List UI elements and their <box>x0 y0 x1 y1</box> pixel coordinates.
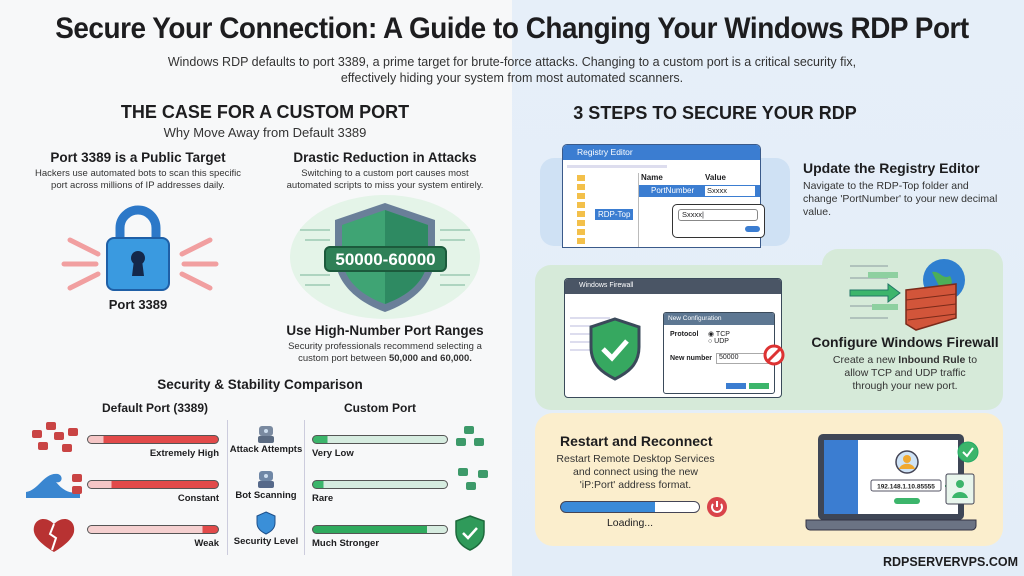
firewall dialog: Protocol <box>670 331 698 338</box>
block: high number ranges <box>286 323 484 364</box>
step 2 text <box>811 334 999 392</box>
bar: scanning default <box>87 480 219 489</box>
icon: padlock <box>62 206 218 291</box>
comparison chart: Bot Scanning <box>235 490 297 501</box>
block: high number ranges: custom port between 50,000 and 60,000. <box>298 353 472 364</box>
comparison chart: Rare <box>312 493 333 504</box>
bar: scanning custom <box>312 480 448 489</box>
firewall dialog: ○ UDP <box>708 338 729 345</box>
block: public target: Port 3389 is a Public Target <box>50 150 226 165</box>
column heading custom: Custom Port <box>344 401 416 415</box>
firewall dialog: 50000 <box>719 354 738 361</box>
registry window: Registry Editor <box>577 147 633 157</box>
registry dialog <box>672 204 765 238</box>
icon: green shield <box>590 317 640 381</box>
column heading default: Default Port (3389) <box>102 401 208 415</box>
firewall dialog: New number <box>670 355 712 362</box>
subtitle: effectively hiding your system from most automated scanners. <box>341 71 683 85</box>
left heading <box>121 102 409 140</box>
subtitle: Windows RDP defaults to port 3389, a prime target for brute-force attacks. Changing to a custom port is a critical security fix, <box>168 55 856 69</box>
block: drastic reduction: automated scripts to miss your system entirely. <box>287 180 483 191</box>
icon: shield 50000-60000 <box>290 195 480 319</box>
icon: shield 50000-60000: 50000-60000 <box>335 250 436 269</box>
loading bar <box>560 501 700 513</box>
comparison chart <box>26 420 488 555</box>
step 1 text <box>803 160 997 218</box>
step 3 text: 'iP:Port' address format. <box>580 479 691 491</box>
bar: security custom <box>312 525 448 534</box>
comparison chart: Weak <box>194 538 219 549</box>
loading label: Loading... <box>607 517 653 529</box>
footer brand: RDPSERVERVPS.COM <box>883 555 1018 569</box>
icons middle <box>258 426 274 443</box>
labels middle: Attack Attempts <box>230 444 302 455</box>
comparison chart: Security Level <box>234 536 298 547</box>
bar: attack default <box>87 435 219 444</box>
comparison chart: Much Stronger <box>312 538 379 549</box>
registry window <box>562 144 761 248</box>
bar: security default <box>87 525 219 534</box>
block: public target: Hackers use automated bots to scan this specific <box>35 168 241 179</box>
left heading: THE CASE FOR A CUSTOM PORT <box>121 102 409 122</box>
icons left: red bots, wave, broken heart <box>26 422 82 552</box>
registry window: Value <box>705 173 726 182</box>
registry window: PortNumber <box>651 186 694 195</box>
step 1 text: Update the Registry Editor <box>803 160 980 176</box>
registry dialog: Sxxxx| <box>682 210 704 219</box>
registry window: RDP-Top <box>598 210 630 219</box>
firewall dialog: New Configuration <box>668 315 721 322</box>
right heading: 3 STEPS TO SECURE YOUR RDP <box>573 103 857 123</box>
icons right: green bots, shield <box>455 426 488 551</box>
comparison heading: Security & Stability Comparison <box>157 377 363 392</box>
icon: firewall globe <box>850 259 965 331</box>
block: drastic reduction: Switching to a custom port causes most <box>301 168 469 179</box>
step 2 text: Configure Windows Firewall <box>811 334 999 350</box>
registry window: Sxxxx <box>707 186 727 195</box>
step 2 text: through your new port. <box>852 380 958 392</box>
step 3 text: Restart and Reconnect <box>560 433 712 449</box>
block: high number ranges: Security professionals recommend selecting a <box>288 341 482 352</box>
icon: power <box>707 497 727 517</box>
step 1 text: Navigate to the RDP-Top folder and change 'PortNumber' to your new decimal value. <box>803 180 997 218</box>
firewall window: Windows Firewall <box>579 282 633 289</box>
firewall dialog <box>663 312 775 394</box>
panel: restart <box>535 413 1003 546</box>
block: drastic reduction <box>287 150 483 191</box>
laptop: 192.148.1.10.85555 <box>877 484 935 490</box>
block: public target <box>35 150 241 191</box>
comparison chart: Very Low <box>312 448 354 459</box>
subtitle <box>168 55 856 85</box>
title: Secure Your Connection: A Guide to Changing Your Windows RDP Port <box>55 12 969 45</box>
firewall dialog: ◉ TCP <box>708 331 730 338</box>
firewall window <box>564 278 782 398</box>
icon: blocked <box>764 344 784 366</box>
block: public target: port across millions of IP addresses daily. <box>51 180 225 191</box>
background right <box>512 0 1024 576</box>
step 3 text: and connect using the new <box>573 466 698 478</box>
comparison chart: Extremely High <box>150 448 219 459</box>
bar: attack custom <box>312 435 448 444</box>
panel: registry <box>540 158 790 246</box>
registry window: Name <box>641 173 663 182</box>
step 2 text: Create a new Inbound Rule to <box>833 354 977 366</box>
laptop <box>806 434 978 530</box>
block: drastic reduction: Drastic Reduction in Attacks <box>293 150 477 165</box>
step 3 text: Restart Remote Desktop Services <box>556 453 715 465</box>
step 2 text: allow TCP and UDP traffic <box>844 367 966 379</box>
panel: firewall <box>535 265 1003 410</box>
label: Port 3389: Port 3389 <box>109 297 167 312</box>
comparison chart: Constant <box>178 493 219 504</box>
step 3 text <box>556 433 715 491</box>
left heading: Why Move Away from Default 3389 <box>164 125 366 140</box>
block: high number ranges: Use High-Number Port Ranges <box>286 323 484 338</box>
